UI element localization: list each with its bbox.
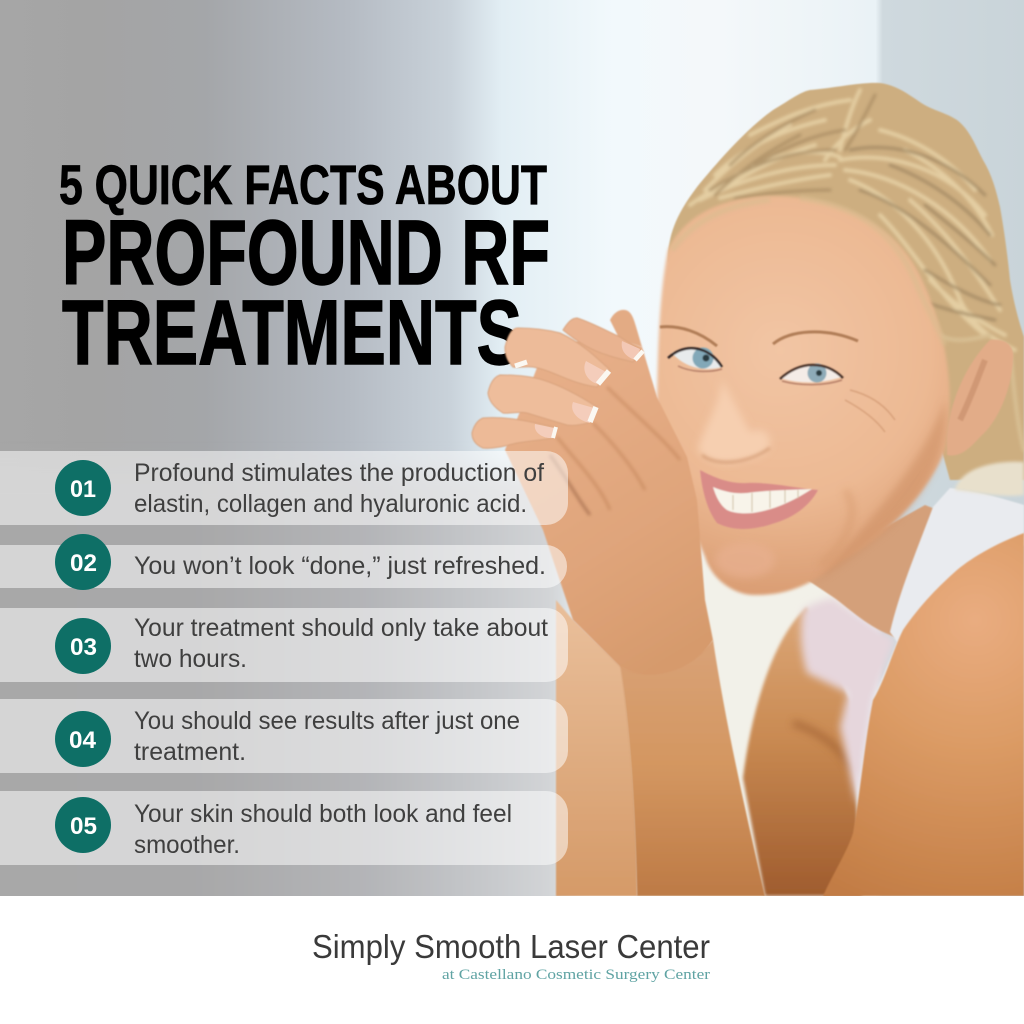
- hair: [668, 83, 1024, 480]
- eye: right: [780, 364, 843, 385]
- photo: smiling woman: [472, 83, 1024, 896]
- eyebrows: [660, 327, 858, 346]
- blouse: [801, 598, 895, 805]
- shoulder: [823, 533, 1024, 896]
- hands: [505, 330, 713, 675]
- title: [59, 153, 550, 384]
- panel: fact 05: Your skin should both look and feel: [134, 800, 512, 828]
- title: 5 QUICK FACTS ABOUT: [59, 153, 547, 216]
- panel: fact 04: treatment.: [134, 738, 246, 766]
- hair strands: [690, 90, 1024, 450]
- panel: fact 01: Profound stimulates the production of: [134, 459, 544, 487]
- panel: fact 04: 04: [69, 727, 97, 754]
- panel: fact 01: [0, 451, 568, 525]
- eye: left: [668, 348, 722, 371]
- forearms: [556, 600, 637, 896]
- panel: fact 01: elastin, collagen and hyaluronic acid.: [134, 490, 527, 518]
- face shading: [815, 400, 946, 582]
- lower hair: [955, 462, 1024, 496]
- panel: fact 05: [0, 791, 568, 865]
- fingernails: [515, 341, 643, 438]
- panel: fact 04: [0, 699, 568, 773]
- panel: fact 05: smoother.: [134, 831, 240, 859]
- white top: [873, 488, 1024, 720]
- fingers: [472, 310, 643, 448]
- panel: fact 01: 01: [70, 476, 96, 503]
- smile: [700, 470, 818, 529]
- hairline wisps: [672, 198, 945, 345]
- panel: fact 02: [0, 534, 567, 590]
- footer logo: [0, 896, 1024, 1024]
- crow's feet wrinkles: [845, 390, 895, 432]
- footer logo: Simply Smooth Laser Center: [312, 928, 710, 965]
- nose: [698, 380, 770, 463]
- panel: fact 03: two hours.: [134, 645, 247, 673]
- panel: fact 02: 02: [70, 550, 97, 577]
- panel: fact 05: 05: [70, 813, 97, 840]
- panel: fact 03: Your treatment should only take about: [134, 614, 548, 642]
- arm crease: [793, 723, 853, 770]
- neck: [800, 505, 950, 640]
- panel: fact 04: You should see results after just one: [134, 707, 520, 735]
- face: [657, 196, 950, 595]
- far arm: [743, 607, 862, 896]
- title: TREATMENTS: [62, 282, 522, 384]
- panel: fact 03: [0, 608, 568, 682]
- ear: [947, 340, 1013, 456]
- footer logo: at Castellano Cosmetic Surgery Center: [442, 967, 710, 983]
- panel: fact 02: You won’t look “done,” just refreshed.: [134, 552, 546, 580]
- panel: fact 03: 03: [70, 634, 97, 661]
- title: PROFOUND RF: [62, 202, 550, 304]
